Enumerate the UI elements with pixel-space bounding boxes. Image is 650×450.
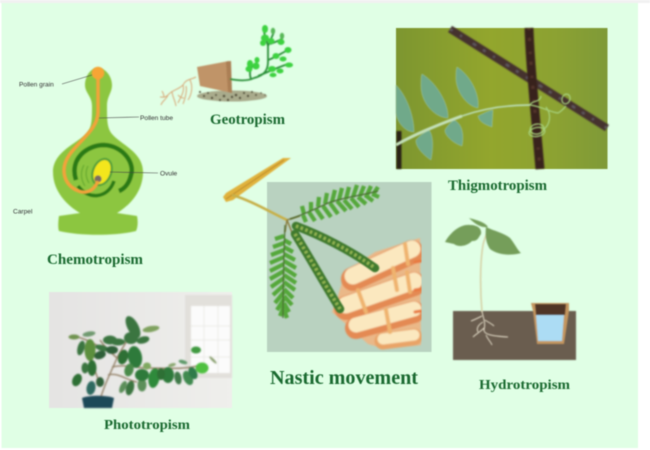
water pot	[531, 303, 569, 344]
label: carpel: Carpel	[13, 208, 33, 216]
carpel shape	[53, 68, 143, 235]
pot	[82, 396, 114, 408]
wall	[49, 292, 232, 408]
heading: hydrotropism: Hydrotropism	[479, 378, 570, 393]
panel: hydrotropism illustration	[445, 218, 576, 360]
label: pollen grain: Pollen grain	[19, 82, 54, 88]
panel edge mask	[422, 236, 432, 350]
roots	[160, 77, 196, 106]
ovule	[87, 155, 117, 189]
open leaf: upper	[290, 185, 379, 222]
photo background	[396, 28, 608, 169]
label: ovule: Ovule	[160, 170, 178, 178]
leaves and tendrils	[396, 67, 571, 160]
window	[185, 295, 232, 378]
label: ovule	[110, 170, 178, 178]
pollen tube	[64, 74, 98, 192]
panel background	[267, 182, 432, 352]
panel: chemotropism diagram	[13, 67, 178, 235]
heading: nastic movement: Nastic movement	[270, 368, 419, 389]
label: pollen tube: Pollen tube	[140, 115, 173, 122]
stem	[230, 32, 288, 80]
heading: geotropism: Geotropism	[210, 112, 285, 128]
hand	[332, 238, 421, 349]
rusty rods	[399, 28, 607, 169]
heading: chemotropism: Chemotropism	[47, 252, 143, 268]
heading: thigmotropism: Thigmotropism	[448, 178, 547, 194]
panel: geotropism illustration	[160, 25, 293, 106]
open leaf: lower left	[270, 225, 296, 318]
potted plant	[68, 314, 217, 408]
panel: phototropism photo	[49, 292, 232, 408]
label: pollen tube	[99, 115, 173, 122]
folded leaflets	[295, 226, 375, 309]
pot	[197, 61, 232, 93]
mimosa stalk	[223, 158, 300, 235]
heading: phototropism: Phototropism	[104, 418, 190, 433]
label: pollen grain	[19, 75, 92, 88]
pollen grain	[92, 67, 104, 79]
panel: thigmotropism photo	[396, 28, 608, 169]
leaves	[246, 25, 293, 77]
panel: nastic movement illustration	[223, 158, 432, 352]
soil	[197, 90, 267, 102]
soil	[453, 311, 576, 360]
seedling	[445, 218, 521, 345]
